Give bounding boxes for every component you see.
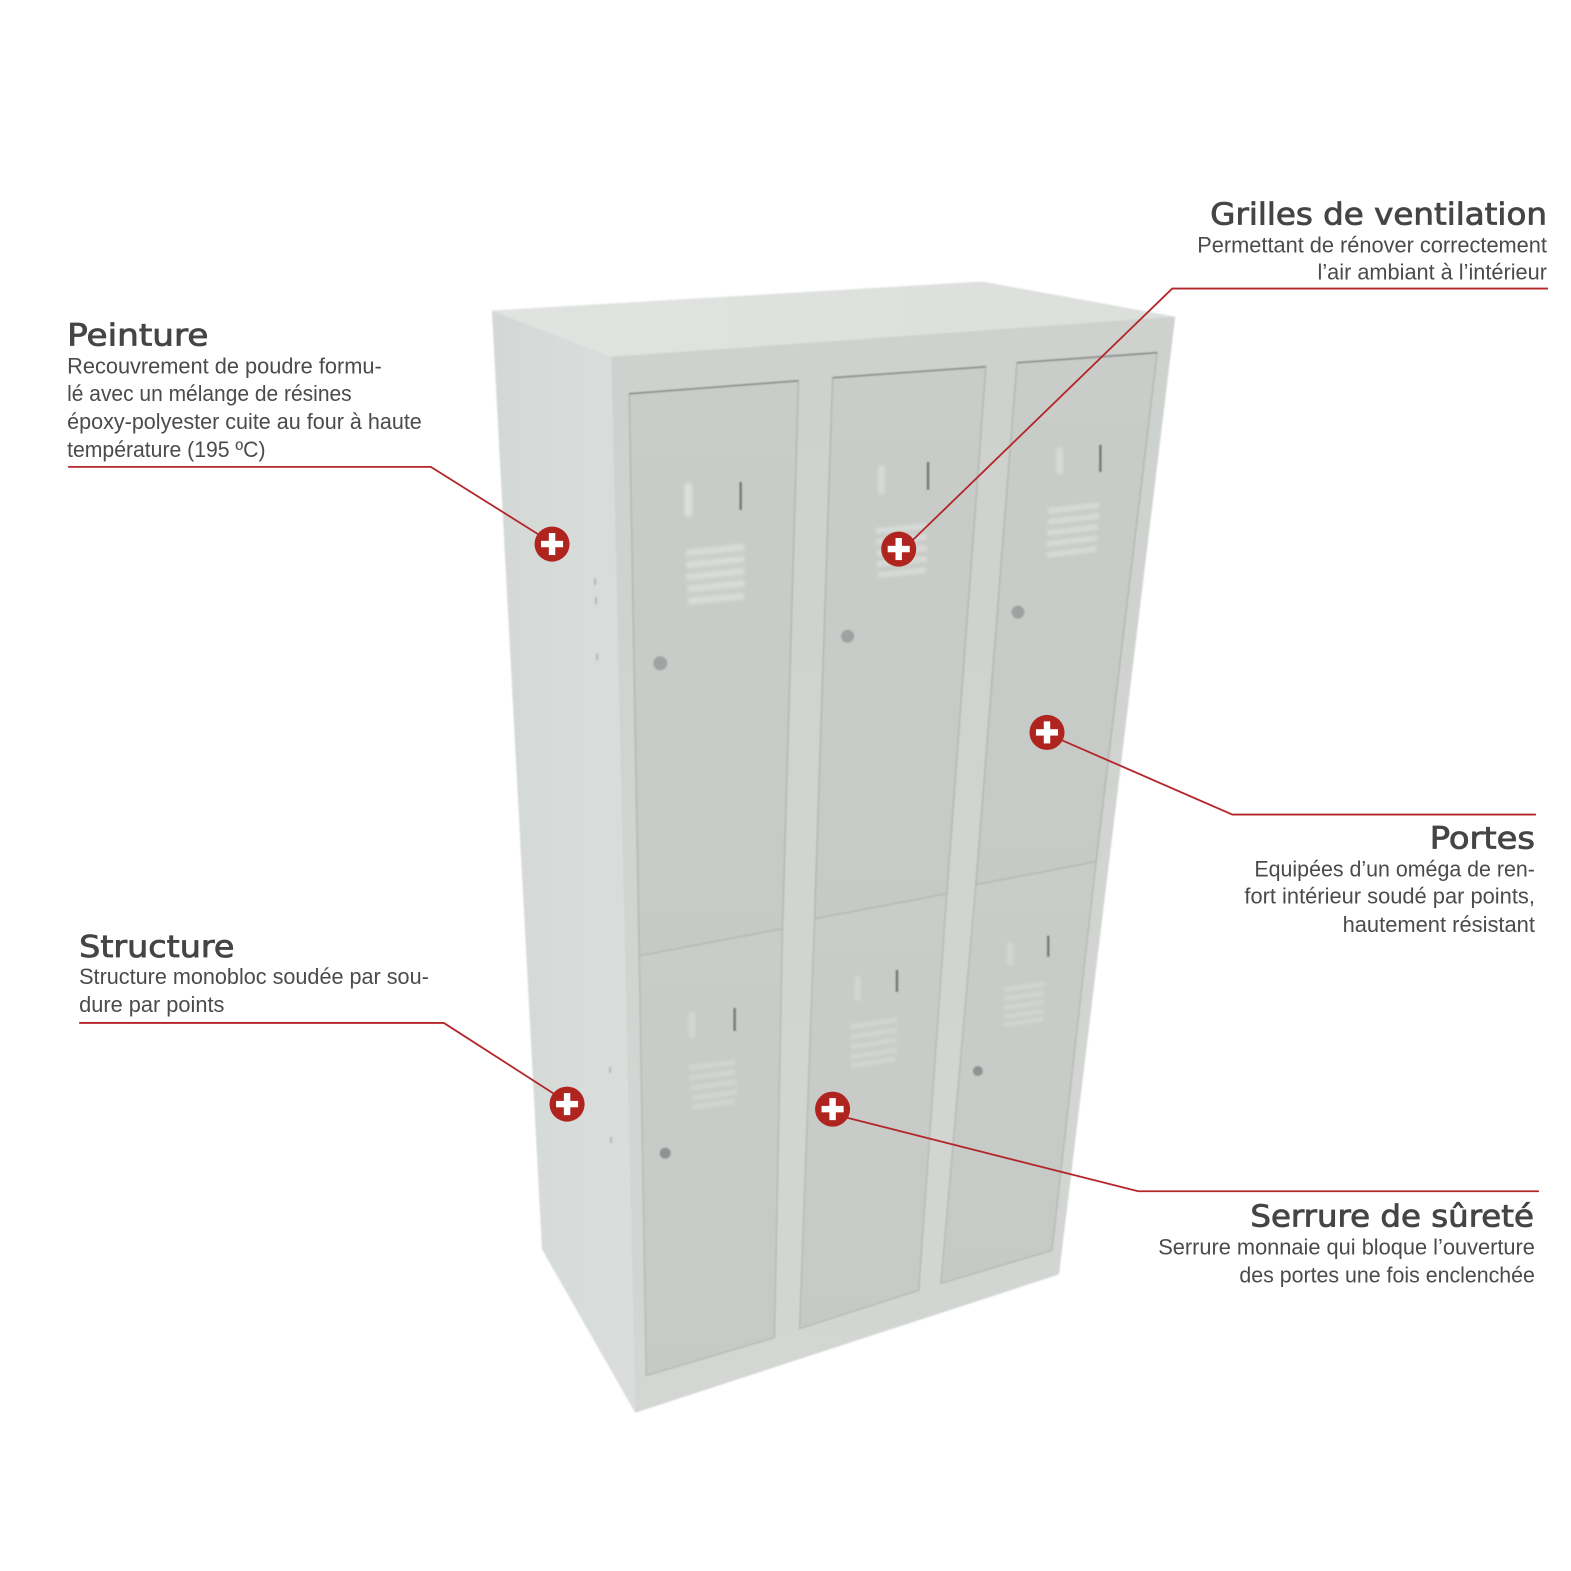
icon: plus marker Structure [550, 1087, 585, 1122]
text: Peinture description: Recouvrement de poudre formu- [67, 354, 382, 379]
cabinet front frame [611, 317, 1175, 1413]
handles and vents: column 1 upper [653, 482, 745, 670]
text: Serrure description: des portes une fois enclenchée [1239, 1262, 1535, 1287]
callout: Peinture [67, 319, 541, 536]
text: Portes description: hautement résistant [1343, 912, 1536, 937]
text: Serrure description [1158, 1234, 1535, 1287]
text: Grilles description: l’air ambiant à l’intérieur [1318, 260, 1547, 285]
heading: Grilles de ventilation: Grilles de ventilation [1210, 197, 1547, 232]
callout: Serrure de sûreté [845, 1117, 1539, 1287]
text: Peinture description: époxy-polyester cuite au four à haute [67, 409, 422, 434]
door: column 3 lower [941, 862, 1096, 1283]
leader line: Grilles [912, 289, 1548, 541]
leader line: Portes [1060, 739, 1536, 815]
text: Grilles description: Permettant de rénover correctement [1197, 232, 1548, 257]
text: Peinture description: température (195 ºC) [67, 437, 266, 462]
heading: Serrure de sûreté: Serrure de sûreté [1250, 1199, 1534, 1234]
icon: plus marker Serrure de sûreté [815, 1092, 850, 1127]
heading: Portes: Portes [1430, 822, 1535, 857]
icon: plus marker Portes [1029, 715, 1065, 750]
callout: Portes [1060, 739, 1536, 937]
icon: plus marker Grilles de ventilation [881, 532, 916, 567]
text: Portes description: fort intérieur soudé par points, [1244, 884, 1535, 909]
text: Structure description [79, 964, 429, 1017]
door: column 3 upper [976, 353, 1157, 885]
callout: Structure [79, 930, 556, 1095]
cabinet top face [492, 282, 1175, 357]
door: column 1 upper [629, 381, 799, 956]
cabinet left side face [492, 311, 635, 1413]
callout: Grilles de ventilation [912, 197, 1548, 541]
door: column 2 lower [800, 894, 947, 1329]
icon: plus marker Peinture [535, 527, 570, 562]
text: Structure description: Structure monobloc soudée par sou- [79, 964, 429, 989]
door: column 2 upper [815, 367, 986, 919]
text: Peinture description: lé avec un mélange de résines [67, 381, 352, 406]
locker cabinet [492, 282, 1175, 1413]
text: Peinture description [67, 354, 422, 462]
text: Grilles description [1197, 232, 1548, 285]
handles and vents: column 2 lower [851, 970, 898, 1066]
text: Portes description: Equipées d’un oméga de ren- [1254, 857, 1535, 882]
side panel holes [594, 578, 612, 1143]
leader line: Peinture [68, 467, 541, 536]
text: Structure description: dure par points [79, 992, 224, 1017]
leader line: Structure [79, 1023, 556, 1095]
heading: Structure: Structure [79, 930, 234, 965]
top door gap shadows [629, 353, 1157, 394]
handles and vents: column 3 upper [1011, 445, 1102, 619]
door: column 1 lower [639, 929, 782, 1376]
handles and vents: column 3 lower [973, 936, 1050, 1076]
text: Serrure description: Serrure monnaie qui bloque l’ouverture [1158, 1234, 1535, 1259]
leader line: Serrure [845, 1117, 1539, 1191]
handles and vents: column 1 lower [660, 1008, 736, 1159]
heading: Peinture: Peinture [67, 319, 208, 354]
text: Portes description [1244, 857, 1536, 937]
handles and vents: column 2 upper [841, 462, 929, 643]
